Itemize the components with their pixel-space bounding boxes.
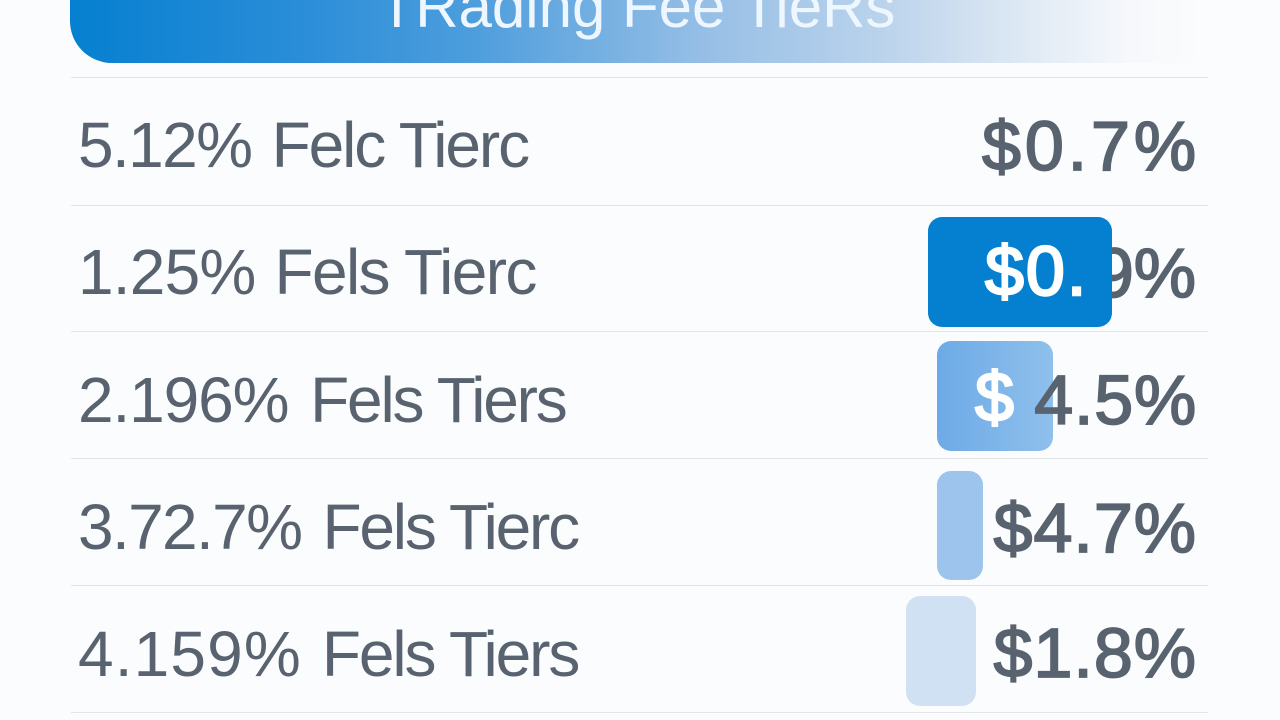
row 2 bar (928, 217, 1112, 327)
row 3 bar (937, 341, 1053, 451)
row 4 bar (937, 471, 983, 580)
row 3 bar text: $ (975, 358, 1014, 436)
row 5 bar (906, 596, 976, 706)
row 2 value: $0.9% (998, 234, 1196, 312)
row 1 label: 5.12% Felc Tierc (78, 109, 528, 181)
title banner (70, 0, 1208, 63)
row 2 label: 1.25% Fels Tierc (78, 236, 536, 308)
row 3 label: 2.196% Fels Tiers (78, 364, 566, 436)
row 5 label: 4.159% Fels Tiers (78, 618, 578, 690)
row 4 value: $4.7% (994, 489, 1197, 567)
row 2 bar text: $0. (985, 232, 1088, 310)
row 3 value: 4.5% (1034, 361, 1197, 439)
row 4 label: 3.72.7% Fels Tierc (78, 491, 578, 563)
row 1 value: $0.7% (982, 107, 1200, 185)
row 5 value: $1.8% (994, 614, 1197, 692)
